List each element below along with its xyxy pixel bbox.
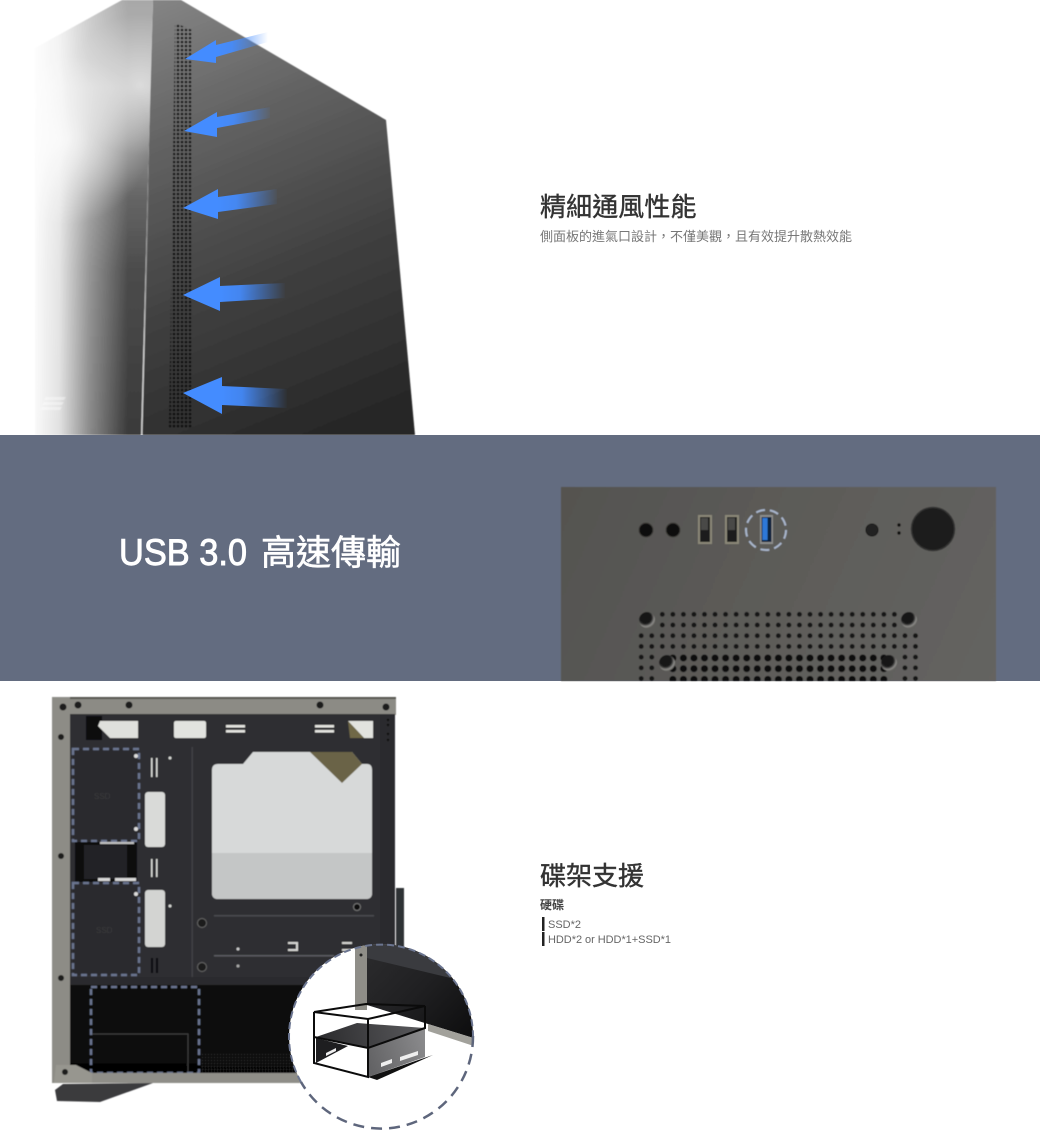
lens dashed outline lower [301,1036,473,1129]
pill cutout 2 [145,890,165,947]
middle gap [75,842,137,882]
frame screws [57,702,390,1075]
tower side face [38,0,154,435]
tower edge highlight [141,60,152,435]
arrow 3 [183,189,277,219]
lower compartment [70,985,310,1073]
spec row: SSD: SSD*2 [548,919,581,931]
mesh holes [636,609,920,681]
USB 2.0 port 2 [725,515,739,544]
shelf strip [70,977,310,985]
lens background [289,944,473,1128]
chassis foot [55,1083,153,1102]
USB 2.0 port 1 [698,515,712,544]
mesh screws [639,612,917,671]
upper SSD mount [73,749,139,841]
pill cutout 1 [145,792,165,847]
lower SSD mount [73,883,139,975]
heading: drive support: 碟架支援 [540,861,644,891]
power button [912,508,954,550]
lower plate details [198,915,374,972]
chassis frame [52,697,396,1083]
motherboard window [212,752,372,910]
arrow 1 [185,32,268,63]
panel: front IO photo [561,487,996,681]
rail dots [387,719,389,741]
audio jack 1 [639,523,653,537]
chassis back plate [70,714,381,979]
status LEDs [897,523,901,535]
rear bracket [396,888,404,958]
text: ventilation description: 側面板的進氣口設計，不僅美觀，且有效提升散熱效能 [540,229,852,244]
reset button [866,524,878,536]
intake vent perforations [169,23,192,428]
text: drive label: 硬碟 [540,898,564,912]
divider line [192,747,193,980]
audio jack 2 [666,523,680,537]
lens dashed outline upper [289,945,473,1082]
USB 3.0 port [760,515,773,544]
lower SSD mount: SSD [96,926,113,935]
heading: USB 3.0: 高速傳輸 [261,534,401,573]
bracket right plate [368,1028,425,1077]
center slots [151,756,172,973]
bracket flange [368,1055,433,1080]
USB 3.0 dashed highlight [746,510,786,550]
callout: drive bracket magnifier [289,940,480,1129]
corner screw [62,1069,68,1075]
heading: USB 3.0: USB 3.0 [119,532,247,573]
corner plate [54,1065,92,1083]
arrow 5 [183,377,287,414]
heading: ventilation: 精細通風性能 [540,192,697,222]
bracket left plate [316,1038,348,1063]
panel: USB band [0,435,1040,681]
bracket wireframe [314,1004,425,1077]
spec row: HDD: HDD*2 or HDD*1+SSD*1 [548,934,671,946]
arrow 4 [183,277,285,311]
bracket top plate [316,1023,425,1048]
upper SSD mount: SSD [94,792,111,801]
bottom rail [70,1073,310,1083]
bracket slots [326,1048,418,1067]
heading: USB 3.0 [119,532,401,573]
perforated floor [200,1053,300,1073]
PSU shelf [92,1034,188,1073]
right rail [380,714,395,954]
panel: chassis interior photo [52,697,404,1102]
arrow 2 [184,107,270,137]
PSU dashed bay [91,987,199,1073]
top cutouts [86,716,373,740]
lens photo [355,944,473,1046]
panel: ventilation tower photo [0,0,415,435]
tower front panel [141,0,415,435]
